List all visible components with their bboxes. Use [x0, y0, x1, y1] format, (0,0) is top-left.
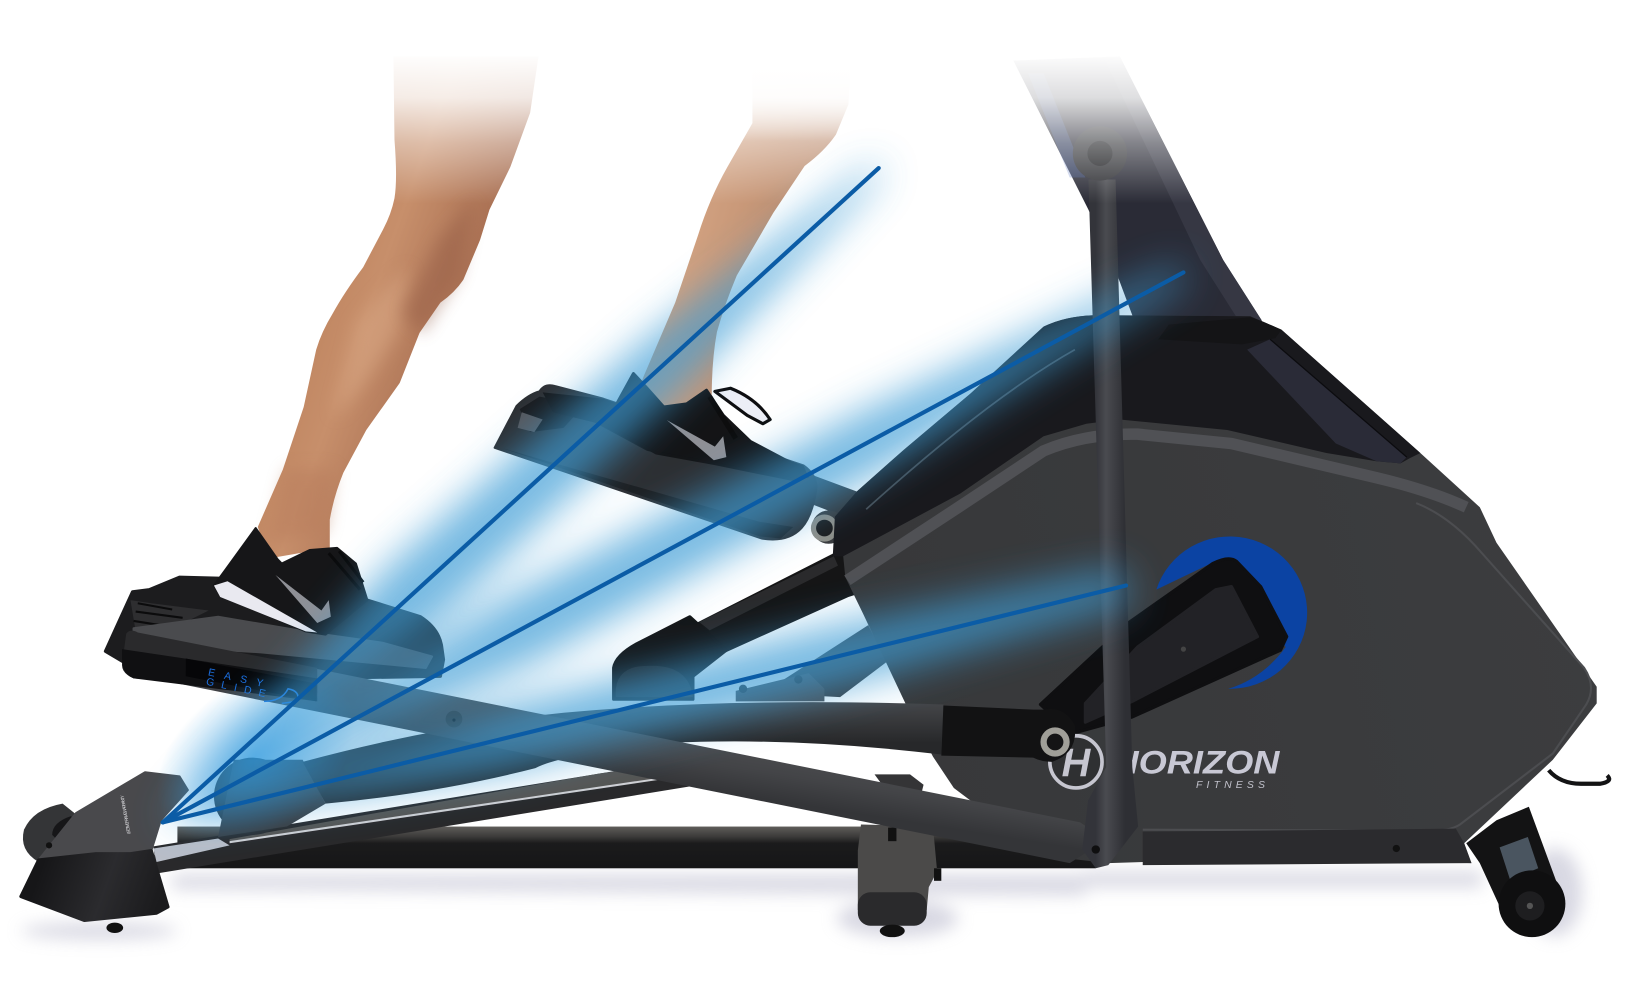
rim band [847, 434, 1466, 580]
top fade to white [0, 0, 1628, 204]
rear wheel and sleeve [214, 758, 326, 837]
long rail with display [122, 631, 1106, 863]
hinge cap [1158, 317, 1282, 344]
upper shoe [603, 374, 804, 480]
right leg [632, 63, 851, 412]
curved connecting arm [303, 702, 943, 804]
lower pedal [105, 577, 444, 678]
rear support strut [763, 625, 887, 697]
power cord [1549, 770, 1609, 784]
panel bottom rim [1143, 829, 1471, 865]
stride line: middle [163, 272, 1183, 822]
lower black arm [614, 548, 871, 699]
upper pedal [495, 385, 816, 539]
long rail with display: EASY [207, 667, 273, 692]
base tube [177, 827, 1096, 868]
shroud highlight [866, 350, 1075, 509]
base plate, foot cover and handle [21, 772, 188, 920]
machine housing [833, 315, 1597, 865]
shroud side face [1247, 339, 1407, 463]
left leg [258, 56, 538, 558]
machine mast [1013, 56, 1262, 344]
front stabilizer [1466, 807, 1565, 937]
long rail with display: GLIDE [205, 677, 274, 702]
center stabilizer bracket [858, 824, 941, 937]
leveling foot left [106, 923, 123, 933]
blue crank disc [1156, 536, 1307, 689]
logo: Horizon Fitness [1050, 736, 1280, 791]
stride line: long [163, 168, 879, 822]
base plate, foot cover and handle: LIFETIME FRAME WARRANTY [119, 794, 131, 835]
arm cuff and bearing [941, 705, 1075, 762]
handle pole [1073, 126, 1138, 868]
floor shadows [21, 848, 1582, 939]
glow: blue light wedges [124, 164, 1188, 879]
panel border [1143, 503, 1591, 831]
bracket on strut [736, 673, 824, 701]
lower shoe [214, 528, 367, 635]
logo: Horizon Fitness: HORIZON [1112, 744, 1280, 780]
crank arm [1040, 559, 1287, 734]
upper pedal arm tube and roller [804, 472, 857, 544]
stride track [153, 756, 725, 874]
logo: Horizon Fitness: H [1062, 741, 1092, 785]
black shroud [833, 315, 1420, 556]
stride line: short [163, 585, 1126, 822]
logo: Horizon Fitness: FITNESS [1196, 780, 1269, 791]
rear plate behind rail [875, 774, 924, 806]
